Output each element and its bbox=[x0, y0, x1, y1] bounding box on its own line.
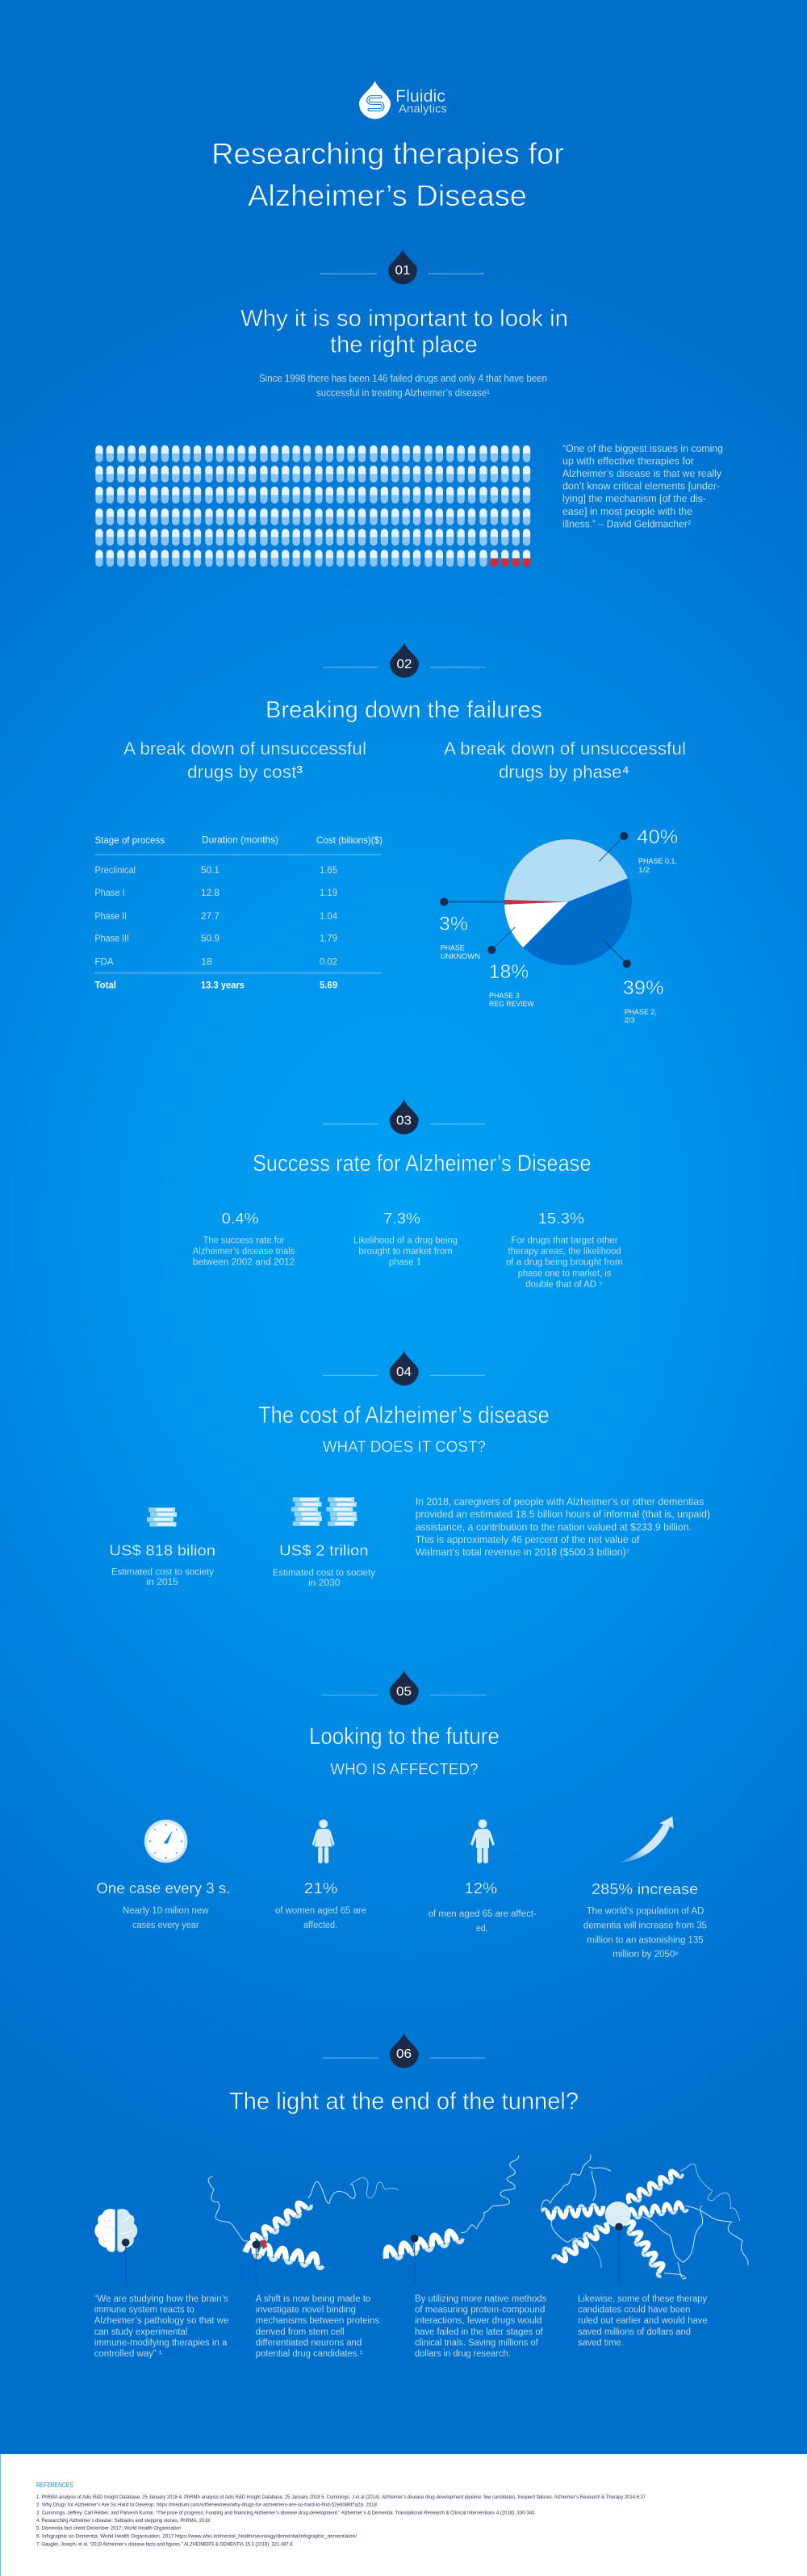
cost table: 50.9 bbox=[201, 933, 220, 944]
cost table: 27.7 bbox=[201, 910, 220, 922]
callout: 3%: 3% bbox=[439, 914, 468, 935]
text block: native methods: of measuring protein-compound bbox=[415, 2305, 545, 2315]
section 06 badge: 06 bbox=[396, 2047, 412, 2061]
logo: Fluidic Analytics bbox=[359, 81, 447, 119]
text block: brain immune system quote: Alzheimer’s pathology so that we bbox=[94, 2316, 228, 2326]
text block: brain immune system quote: “We are studying how the brain’s bbox=[94, 2294, 228, 2304]
callout: 18%: REG REVIEW bbox=[489, 1000, 534, 1009]
section 04 heading: WHAT DOES IT COST? bbox=[323, 1438, 486, 1456]
cost table: Duration (months) bbox=[202, 834, 278, 846]
stat: 15.3%: 15.3% bbox=[538, 1210, 584, 1227]
section 04 badge: 04 bbox=[396, 1365, 412, 1379]
text block: therapy candidates: ruled out earlier and would have bbox=[578, 2316, 708, 2326]
text block: binding mechanisms: mechanisms between proteins bbox=[256, 2316, 379, 2326]
cost table: 12.8 bbox=[201, 887, 220, 898]
pie chart: failures by phase bbox=[504, 839, 632, 965]
references list: 1. PhRMA analysis of Adis R&D Insight Database, 25 January 2018 4. PhRMA analysis of Adis R&D Insight Database, 25 January 2018 5. Cummings, J et al (2014). Alzheimer’s disease drug-development pipeline: few candidates, frequent failures. Alzheimer’s Research & Therapy 2014;6:37 bbox=[36, 2494, 646, 2500]
stat: 0.4%: between 2002 and 2012 bbox=[193, 1258, 295, 1268]
cost table bbox=[94, 834, 383, 991]
text block: therapy candidates: saved time. bbox=[578, 2339, 624, 2348]
stat: US$ 818 bilion with money icon: Estimated cost to society bbox=[111, 1568, 214, 1578]
section 04 badge bbox=[323, 1351, 486, 1386]
stat: 15.3%: For drugs that target other bbox=[512, 1236, 618, 1245]
stat: 21% of women: affected. bbox=[303, 1921, 337, 1930]
quote: David Geldmacher: up with effective therapies for bbox=[562, 455, 694, 466]
cost table: Stage of process bbox=[95, 834, 165, 846]
text block: native methods: interactions, fewer drugs would bbox=[415, 2316, 541, 2326]
section 06 heading: The light at the end of the tunnel? bbox=[229, 2088, 579, 2114]
references list bbox=[36, 2494, 646, 2547]
callout: 39%: PHASE 2, bbox=[625, 1008, 657, 1017]
icon: woman bbox=[312, 1819, 335, 1863]
text block: therapy candidates: candidates could have been bbox=[578, 2305, 690, 2315]
callout: 40%: PHASE 0,1, bbox=[638, 857, 677, 866]
section 03 heading: Success rate for Alzheimer’s Disease bbox=[253, 1151, 591, 1177]
stat: 12% of men bbox=[429, 1819, 537, 1934]
stat: 21% of women: 21% bbox=[304, 1880, 337, 1896]
subheading: by cost: drugs by cost³ bbox=[187, 762, 303, 782]
section 01 intro text: Since 1998 there has been 146 failed drugs and only 4 that have been bbox=[259, 373, 547, 384]
stat: 21% of women: of women aged 65 are bbox=[275, 1906, 366, 1916]
cost table: 5.69 bbox=[320, 980, 337, 991]
section 03 badge bbox=[323, 1099, 486, 1135]
callout: 3%: PHASE bbox=[441, 944, 465, 953]
text block: native methods: dollars in drug research. bbox=[415, 2349, 511, 2359]
paragraph: caregivers: In 2018, caregivers of people with Alzheimer’s or other dementias bbox=[416, 1496, 704, 1508]
icon: brain with marker bbox=[94, 2209, 137, 2285]
stat: 285% increase bbox=[583, 1817, 707, 1959]
section 05 heading: Looking to the future bbox=[309, 1724, 500, 1750]
quote: David Geldmacher: illness.” – David Geldmacher² bbox=[562, 518, 691, 529]
stat: US$ 2 trilion with money icon bbox=[273, 1497, 375, 1588]
stat: one case every 3 s bbox=[96, 1820, 230, 1930]
references list: 5. Dementia fact sheet December 2017; World Health Organisation bbox=[36, 2526, 182, 2532]
callout: 3%: UNKNOWN bbox=[441, 952, 480, 961]
cost table: Total bbox=[95, 980, 116, 991]
stat: 12% of men: of men aged 65 are affect- bbox=[429, 1909, 537, 1919]
section 04 heading bbox=[258, 1403, 550, 1456]
text block: binding mechanisms: A shift is now being made to bbox=[256, 2294, 370, 2304]
paragraph: caregivers: assistance, a contribution to the nation valued at $233.9 billion. bbox=[416, 1521, 692, 1533]
section 02 heading: Breaking down the failures bbox=[266, 697, 542, 723]
stat: 7.3% bbox=[353, 1210, 458, 1268]
text block: therapy candidates: saved millions of dollars and bbox=[578, 2327, 691, 2337]
references panel bbox=[0, 2454, 807, 2576]
text block: binding mechanisms: derived from stem cell bbox=[256, 2327, 345, 2337]
section 06 badge bbox=[323, 2033, 486, 2068]
title: Alzheimer’s Disease bbox=[248, 179, 527, 212]
paragraph: caregivers: This is approximately 46 percent of the net value of bbox=[416, 1534, 640, 1545]
section 02 badge bbox=[323, 642, 486, 678]
subheading: by cost bbox=[123, 738, 366, 782]
stat: US$ 818 bilion with money icon: in 2015 bbox=[146, 1578, 178, 1587]
section 05 heading bbox=[309, 1724, 500, 1778]
stat: 285% increase: The world’s population of AD bbox=[587, 1906, 704, 1916]
callout: 39% bbox=[604, 940, 664, 1025]
pill chart: failed vs successful drugs bbox=[95, 445, 530, 567]
paragraph: caregivers bbox=[416, 1496, 710, 1558]
stat: 0.4%: Alzheimer’s disease trials bbox=[193, 1247, 295, 1257]
slice: phase 3 reg review 18% bbox=[504, 902, 568, 947]
references list: 7. Gaugler, Joseph, et al. “2019 Alzheimer’s disease facts and figures.” ALZHEIMERS & DEMENTIA 15.3 (2019): 321-387.8 bbox=[36, 2541, 293, 2547]
paragraph: caregivers: Walmart’s total revenue in 2018 ($500.3 billion)⁷ bbox=[416, 1546, 630, 1558]
text block: binding mechanisms: potential drug candidates.¹ bbox=[256, 2349, 362, 2359]
slice: phase 0,1,1/2 40% bbox=[504, 839, 628, 902]
cost table: 1.79 bbox=[320, 933, 337, 944]
icon: large money stacks bbox=[291, 1497, 357, 1526]
callout: 40%: 40% bbox=[637, 826, 678, 848]
stat: 21% of women bbox=[275, 1819, 366, 1930]
section 05 badge bbox=[323, 1671, 486, 1705]
cost table: Phase I bbox=[95, 887, 124, 898]
stat: US$ 2 trilion with money icon: Estimated cost to society bbox=[273, 1568, 375, 1578]
text block: native methods: By utilizing more native methods bbox=[415, 2294, 547, 2304]
quote: David Geldmacher bbox=[562, 443, 723, 529]
stat: 285% increase: 285% increase bbox=[592, 1880, 698, 1897]
stat: 7.3%: 7.3% bbox=[383, 1210, 420, 1227]
callout: 40%: 1/2 bbox=[638, 866, 650, 875]
cost table: 1.19 bbox=[320, 887, 337, 898]
references heading: REFERENCES bbox=[36, 2481, 73, 2489]
icon: man bbox=[470, 1819, 495, 1863]
text block: therapy candidates: Likewise, some of these therapy bbox=[578, 2294, 707, 2304]
stat: US$ 818 bilion with money icon bbox=[109, 1508, 215, 1587]
quote: David Geldmacher: “One of the biggest issues in coming bbox=[562, 443, 723, 454]
subheading: by phase: A break down of unsuccessful bbox=[444, 738, 686, 759]
stat: 0.4%: 0.4% bbox=[222, 1210, 259, 1227]
cost table: Phase II bbox=[95, 910, 127, 922]
cost table: 50.1 bbox=[201, 864, 220, 876]
stat: 7.3%: phase 1 bbox=[389, 1258, 421, 1268]
logo: Fluidic Analytics: Analytics bbox=[399, 102, 447, 116]
text block: native methods: clinical trials. Saving millions of bbox=[415, 2339, 538, 2348]
cost table: Cost (bilions)($) bbox=[316, 834, 383, 846]
cost table: Phase III bbox=[95, 933, 129, 944]
logo: Fluidic Analytics: Fluidic bbox=[395, 87, 445, 106]
stat: 285% increase: dementia will increase from 35 bbox=[583, 1921, 707, 1930]
text block: brain immune system quote: immune system reacts to bbox=[94, 2305, 194, 2315]
references list: 3. Cummings, Jeffrey, Carl Reiber, and Parvesh Kumar. “The price of progress: Funding and financing Alzheimer’s disease drug development.” Alzheimer’s & Dementia: Translational Research & Clinical Interventions 4 (2018): 330-343. bbox=[36, 2510, 536, 2515]
callout: 39%: 2/3 bbox=[625, 1016, 635, 1025]
subheading: by phase: drugs by phase⁴ bbox=[499, 762, 629, 782]
stat: US$ 2 trilion with money icon: in 2030 bbox=[308, 1579, 341, 1588]
title bbox=[211, 137, 564, 212]
text block: binding mechanisms bbox=[256, 2294, 379, 2359]
section 05 heading: WHO IS AFFECTED? bbox=[330, 1760, 479, 1778]
icon: clock bbox=[144, 1820, 187, 1863]
stat: 15.3%: phase one to market, is bbox=[518, 1269, 612, 1278]
stat: 15.3%: therapy areas, the likelihood bbox=[508, 1247, 621, 1257]
illustration: protein network bbox=[541, 2155, 748, 2284]
text block: brain immune system quote: can study experimental bbox=[94, 2327, 187, 2337]
callout: 18%: 18% bbox=[489, 961, 529, 983]
cost table: 13.3 years bbox=[201, 980, 245, 991]
illustration: single protein bbox=[383, 2156, 519, 2284]
title: Researching therapies for bbox=[211, 137, 564, 170]
cost table: 18 bbox=[201, 956, 212, 967]
cost table: FDA bbox=[95, 956, 113, 967]
text block: native methods bbox=[415, 2294, 547, 2359]
section 02 badge: 02 bbox=[397, 658, 412, 671]
stat: one case every 3 s: One case every 3 s. bbox=[96, 1880, 230, 1896]
cost table: Preclinical bbox=[95, 864, 136, 876]
text block: brain immune system quote bbox=[94, 2294, 228, 2359]
section 01 badge: 01 bbox=[395, 264, 411, 278]
section 05 badge: 05 bbox=[396, 1685, 412, 1699]
stat: 15.3%: double that of AD ⁵ bbox=[525, 1280, 603, 1290]
section 01 heading: the right place bbox=[330, 332, 478, 358]
stat: 0.4%: The success rate for bbox=[203, 1236, 285, 1245]
stat: 285% increase: million by 2050⁶ bbox=[613, 1950, 679, 1959]
slice: phase unknown 3% bbox=[504, 900, 568, 905]
stat: 7.3%: brought to market from bbox=[358, 1247, 453, 1257]
references list: 4. Researching Alzheimer’s disease: Setbacks and stepping stones. PhRMA. 2018 bbox=[36, 2518, 210, 2524]
stat: 12% of men: ed. bbox=[476, 1924, 488, 1934]
callout: 39%: 39% bbox=[623, 977, 664, 999]
quote: David Geldmacher: Alzheimer’s disease is that we really bbox=[562, 468, 722, 479]
text block: binding mechanisms: investigate novel binding bbox=[256, 2305, 356, 2315]
stat: US$ 818 bilion with money icon: US$ 818 bilion bbox=[109, 1542, 215, 1559]
paragraph: caregivers: provided an estimated 18.5 billion hours of informal (that is, unpaid) bbox=[416, 1509, 710, 1520]
illustration: binding proteins bbox=[208, 2177, 398, 2287]
section 01 intro text: successful in treating Alzheimer’s disease¹ bbox=[316, 387, 490, 399]
text block: brain immune system quote: immune-modifying therapies in a bbox=[94, 2339, 228, 2348]
callout: 40% bbox=[599, 826, 678, 875]
stat: 285% increase: million to an astonishing 135 bbox=[587, 1935, 704, 1945]
cost table: 1.65 bbox=[320, 864, 337, 876]
stat: 12% of men: 12% bbox=[464, 1880, 497, 1896]
callout: 18%: PHASE 3 bbox=[489, 992, 520, 1001]
stat: one case every 3 s: Nearly 10 milion new bbox=[123, 1906, 209, 1916]
stat: 0.4% bbox=[193, 1210, 295, 1268]
quote: David Geldmacher: ease] in most people with the bbox=[562, 506, 692, 517]
section 04 heading: The cost of Alzheimer’s disease bbox=[258, 1403, 550, 1428]
section 01 heading bbox=[240, 306, 568, 358]
icon: small money stack bbox=[147, 1508, 177, 1527]
text block: binding mechanisms: differentiated neurons and bbox=[256, 2339, 362, 2348]
stat: 15.3%: of a drug being brought from bbox=[506, 1258, 622, 1268]
subheading: by cost: A break down of unsuccessful bbox=[123, 738, 366, 759]
callout: 18% bbox=[487, 927, 534, 1009]
icon: rising arrow bbox=[617, 1817, 674, 1863]
section 01 badge bbox=[320, 249, 484, 284]
stat: 7.3%: Likelihood of a drug being bbox=[353, 1236, 458, 1245]
section 03 badge: 03 bbox=[396, 1114, 412, 1128]
quote: David Geldmacher: don’t know critical elements [under- bbox=[562, 481, 720, 492]
callout: 3% bbox=[439, 897, 504, 961]
stat: one case every 3 s: cases every year bbox=[132, 1921, 199, 1930]
cost table: 0.02 bbox=[320, 956, 337, 967]
section 01 intro text bbox=[259, 373, 547, 399]
references list: 6. Infographic on Dementia. World Health Organisation. 2017 https://www.who.int/mental_health/neurology/dementia/infographic_dementia/en/ bbox=[36, 2533, 357, 2539]
stat: 15.3% bbox=[506, 1210, 622, 1290]
references list: 2. Why Drugs for Alzheimer’s Are So Hard to Develop. https://medium.com/s/thenewnew/why-drugs-for-alzheimers-are-so-hard-to-find-52e0086f7a2a. 2018 bbox=[36, 2503, 377, 2508]
text block: native methods: have failed in the later stages of bbox=[415, 2327, 543, 2337]
section 01 heading: Why it is so important to look in bbox=[240, 306, 568, 332]
text block: brain immune system quote: controlled way” ¹ bbox=[94, 2349, 162, 2359]
quote: David Geldmacher: lying] the mechanism [of the dis- bbox=[562, 493, 706, 504]
subheading: by phase bbox=[444, 738, 686, 782]
slice: phase 2,2/3 39% bbox=[523, 878, 632, 965]
stat: US$ 2 trilion with money icon: US$ 2 trilion bbox=[279, 1542, 369, 1559]
cost table: 1.04 bbox=[320, 910, 337, 922]
text block: therapy candidates bbox=[578, 2294, 708, 2348]
